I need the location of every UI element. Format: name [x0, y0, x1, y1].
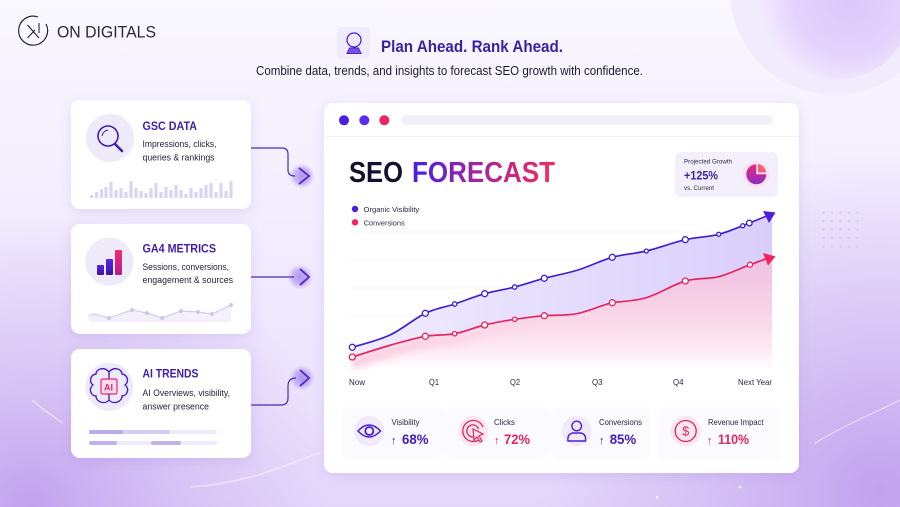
- conversions area: [352, 258, 772, 370]
- panel: AI trends: [71, 349, 251, 458]
- card description: engagement & sources: [142, 275, 233, 285]
- card description: queries & rankings: [142, 152, 215, 162]
- header: [256, 27, 643, 78]
- card heading: GSC DATA: [142, 121, 197, 133]
- panel: GA4 metrics: [71, 224, 251, 334]
- card description: AI Overviews, visibility,: [142, 388, 230, 398]
- callout: projected growth: Projected Growth: [684, 158, 732, 166]
- connector arrow: AI trends: [251, 365, 315, 405]
- icon: user: [562, 416, 592, 446]
- card description: answer presence: [142, 402, 209, 412]
- stat: revenue impact: 110%: [718, 431, 749, 447]
- logo: ON Digitals: [19, 16, 156, 45]
- legend: Organic Visibility: [364, 205, 419, 214]
- stat: clicks: ↑: [494, 435, 500, 447]
- callout: projected growth: [675, 152, 778, 197]
- mini bar chart: [92, 181, 231, 198]
- stat: visibility: [344, 408, 443, 457]
- legend: [352, 205, 419, 227]
- stat: clicks: Clicks: [494, 418, 515, 427]
- icon: cursor click: [458, 416, 488, 446]
- visibility line: [349, 211, 776, 350]
- icon: AI brain: AI: [104, 382, 113, 392]
- stat: visibility: Visibility: [392, 418, 420, 427]
- stat: revenue impact: [661, 408, 778, 457]
- progress bars: [89, 430, 217, 445]
- panel: SEO forecast dashboard: [324, 103, 799, 473]
- stat: revenue impact: ↑: [707, 435, 712, 447]
- title: SEO: [349, 157, 403, 189]
- mini line chart: [89, 303, 233, 322]
- stat: visibility: ↑: [391, 435, 396, 447]
- connector arrow: GA4 metrics: [251, 264, 313, 290]
- card description: Impressions, clicks,: [142, 139, 216, 149]
- callout: projected growth: +125%: [684, 170, 718, 182]
- heading: Plan Ahead. Rank Ahead.: [381, 37, 563, 56]
- icon: crystal ball: [337, 27, 370, 59]
- stat: revenue impact: Revenue Impact: [708, 418, 764, 427]
- callout: projected growth: vs. Current: [684, 185, 714, 192]
- x axis labels: Next Year: [738, 378, 772, 387]
- x axis labels: Q1: [429, 378, 440, 387]
- panel: GSC data: [71, 100, 251, 209]
- logo: ON Digitals: ON DIGITALS: [57, 22, 156, 42]
- stat: visibility: 68%: [402, 431, 429, 447]
- icon: eye: [354, 416, 384, 446]
- x axis labels: Q2: [510, 378, 521, 387]
- card heading: GA4 METRICS: [142, 244, 216, 256]
- card heading: AI TRENDS: [142, 369, 199, 381]
- icon: bar chart: [85, 238, 133, 286]
- x axis labels: Now: [349, 378, 365, 387]
- dot grid decoration: [822, 212, 858, 248]
- subtitle: Combine data, trends, and insights to forecast SEO growth with confidence.: [256, 64, 643, 78]
- title: [349, 157, 555, 189]
- stat: clicks: 72%: [504, 431, 531, 447]
- icon: dollar: $: [682, 424, 689, 438]
- stat: clicks: [448, 408, 548, 457]
- card description: [142, 262, 233, 285]
- title: FORECAST: [412, 157, 555, 189]
- x axis labels: Q4: [673, 378, 684, 387]
- stat: conversions: ↑: [599, 435, 604, 447]
- x axis labels: Q3: [592, 378, 603, 387]
- stat: conversions: Conversions: [599, 418, 642, 427]
- card description: [142, 139, 216, 162]
- icon: AI brain: [85, 363, 133, 411]
- x axis labels: [349, 378, 772, 387]
- stat: conversions: [553, 408, 648, 457]
- conversions line: [349, 253, 776, 360]
- connector arrow: GSC data: [251, 148, 315, 189]
- visibility area: [352, 214, 772, 368]
- line chart: [349, 211, 776, 387]
- icon: magnifier: [86, 114, 134, 162]
- conversions glow: [352, 323, 544, 364]
- card description: Sessions, conversions,: [142, 262, 229, 272]
- stat: conversions: 85%: [610, 431, 637, 447]
- legend: Conversions: [364, 218, 405, 227]
- card description: [142, 388, 230, 412]
- window bar: [324, 115, 799, 136]
